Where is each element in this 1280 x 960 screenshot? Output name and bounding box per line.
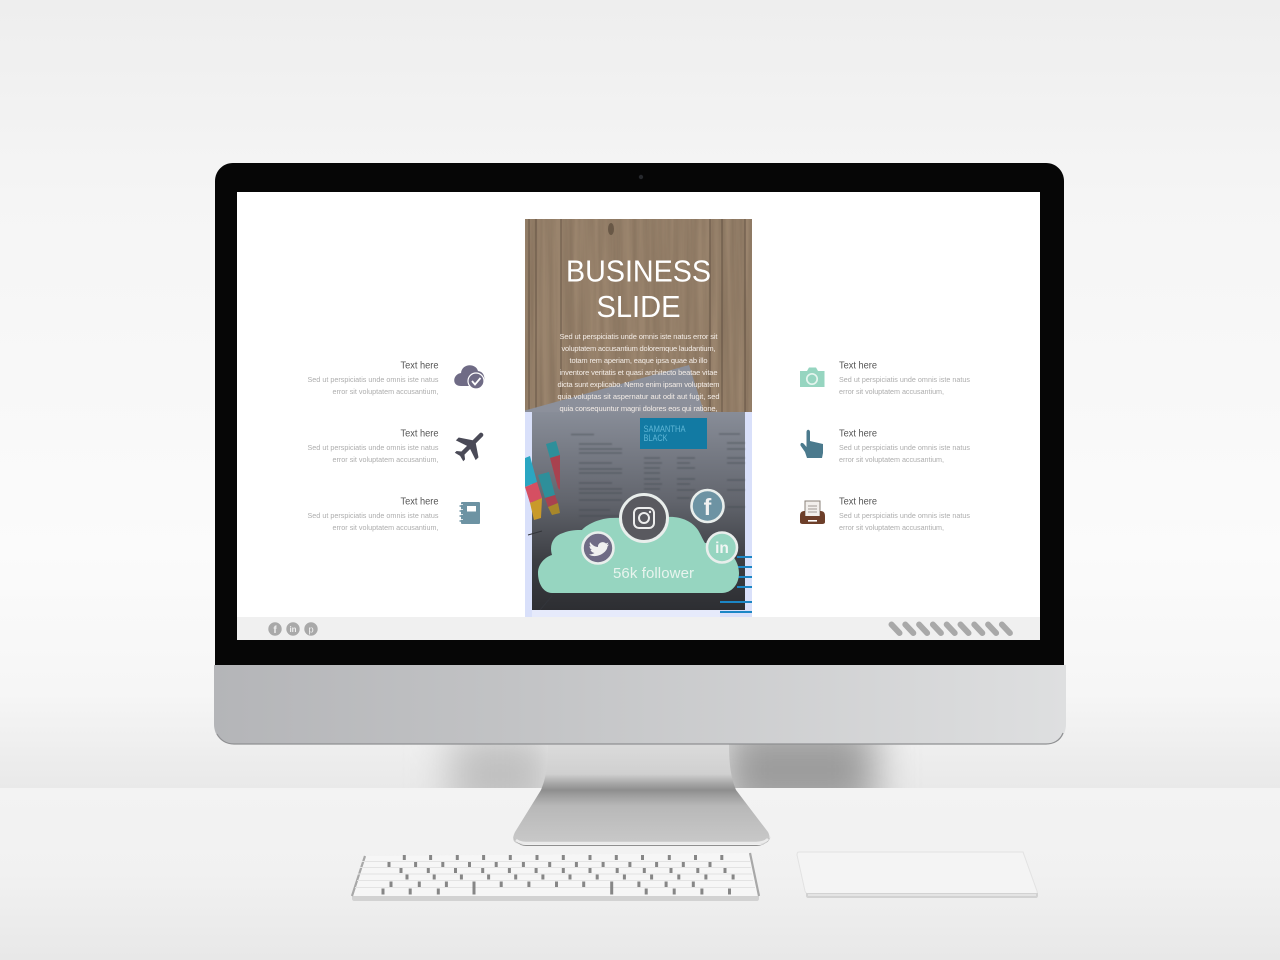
item: text 2: error sit voluptatem accusantium, xyxy=(332,455,438,464)
icon: facebook: f xyxy=(704,494,712,520)
footer social icons xyxy=(268,622,318,636)
panel title: SLIDE xyxy=(596,289,680,324)
panel body text: totam rem aperiam, eaque ipsa quae ab illo xyxy=(570,356,708,365)
panel body text: quia consequuntur magni dolores eos qui ratione, xyxy=(560,404,718,413)
icon: instagram xyxy=(620,494,668,542)
panel body text: dicta sunt explicabo. Nemo enim ipsam voluptatem xyxy=(558,380,720,389)
resume header xyxy=(640,418,707,449)
panel title: BUSINESS xyxy=(566,254,711,288)
right feature list xyxy=(800,360,970,532)
trackpad xyxy=(797,852,1038,898)
item: text 1 xyxy=(308,360,439,396)
monitor stand xyxy=(513,744,771,846)
icon: airplane xyxy=(449,423,493,467)
background: wall and desk xyxy=(0,744,1280,960)
item: text 2: Sed ut perspiciatis unde omnis iste natus xyxy=(839,443,970,452)
item: text 1: error sit voluptatem accusantium, xyxy=(332,387,438,396)
item: text 2 xyxy=(839,428,970,464)
panel body text xyxy=(558,332,720,413)
icon: printer xyxy=(800,501,825,524)
monitor body xyxy=(214,163,1066,744)
item: text 3: Text here xyxy=(400,496,439,508)
cloud with social icons xyxy=(538,490,739,593)
resume photo with dark overlay: BLACK xyxy=(644,433,668,444)
footer social icons: in xyxy=(289,625,297,634)
item: text 1: error sit voluptatem accusantium, xyxy=(839,387,944,396)
panel body text: inventore veritatis et quasi architecto beatae vitae xyxy=(560,368,718,377)
chin xyxy=(214,665,1066,744)
chart bars xyxy=(525,441,560,520)
item: text 2: Text here xyxy=(839,428,877,440)
icon: twitter xyxy=(582,532,614,564)
item: text 3: Sed ut perspiciatis unde omnis iste natus xyxy=(839,511,970,520)
cloud shape xyxy=(538,517,739,593)
item: text 1: Sed ut perspiciatis unde omnis iste natus xyxy=(839,375,970,384)
icon: facebook xyxy=(692,490,724,522)
cloud label: 56k follower xyxy=(613,565,694,582)
resume text xyxy=(571,434,745,516)
footer stripes xyxy=(892,624,1010,633)
icon: linkedin: in xyxy=(715,540,729,557)
screen xyxy=(237,192,1040,640)
photo backing xyxy=(525,412,752,617)
item: text 1: Text here xyxy=(400,360,439,372)
icon: linkedin xyxy=(707,532,737,562)
item: text 3: error sit voluptatem accusantium, xyxy=(839,523,944,532)
footer strip xyxy=(237,617,1040,640)
center panel xyxy=(525,219,752,617)
item: text 3: Text here xyxy=(839,496,877,508)
resume photo with dark overlay xyxy=(525,365,752,617)
keyboard rows xyxy=(383,855,733,894)
panel body text: voluptatem accusantium doloremque laudantium, xyxy=(562,344,716,353)
footer social icons: f xyxy=(273,625,277,636)
item: text 2: Sed ut perspiciatis unde omnis iste natus xyxy=(308,443,439,452)
camera xyxy=(639,175,643,179)
item: text 1 xyxy=(839,360,970,396)
icon: camera xyxy=(800,368,824,387)
resume photo with dark overlay: SAMANTHA xyxy=(644,424,686,435)
item: text 3: error sit voluptatem accusantium, xyxy=(332,523,438,532)
panel body text: Sed ut perspiciatis unde omnis iste natus error sit xyxy=(560,332,718,341)
left feature list xyxy=(308,360,493,532)
item: text 3 xyxy=(308,496,439,532)
item: text 1: Sed ut perspiciatis unde omnis iste natus xyxy=(308,375,439,384)
icon: pointing hand xyxy=(800,430,823,458)
footer social icons: p xyxy=(308,624,314,636)
panel title xyxy=(568,260,710,318)
item: text 3: Sed ut perspiciatis unde omnis iste natus xyxy=(308,511,439,520)
icon: cloud with check xyxy=(454,365,484,389)
icon: notebook xyxy=(460,502,480,524)
item: text 2 xyxy=(308,428,439,464)
blue lines right xyxy=(720,557,752,612)
bezel xyxy=(215,163,1064,665)
keyboard xyxy=(352,853,759,901)
panel body text: quia voluptas sit aspernatur aut odit aut fugit, sed xyxy=(558,392,720,401)
item: text 3 xyxy=(839,496,970,532)
side bottom fragments xyxy=(528,530,542,610)
wood photo xyxy=(525,219,752,415)
item: text 1: Text here xyxy=(839,360,877,372)
item: text 2: Text here xyxy=(400,428,439,440)
item: text 2: error sit voluptatem accusantium, xyxy=(839,455,944,464)
